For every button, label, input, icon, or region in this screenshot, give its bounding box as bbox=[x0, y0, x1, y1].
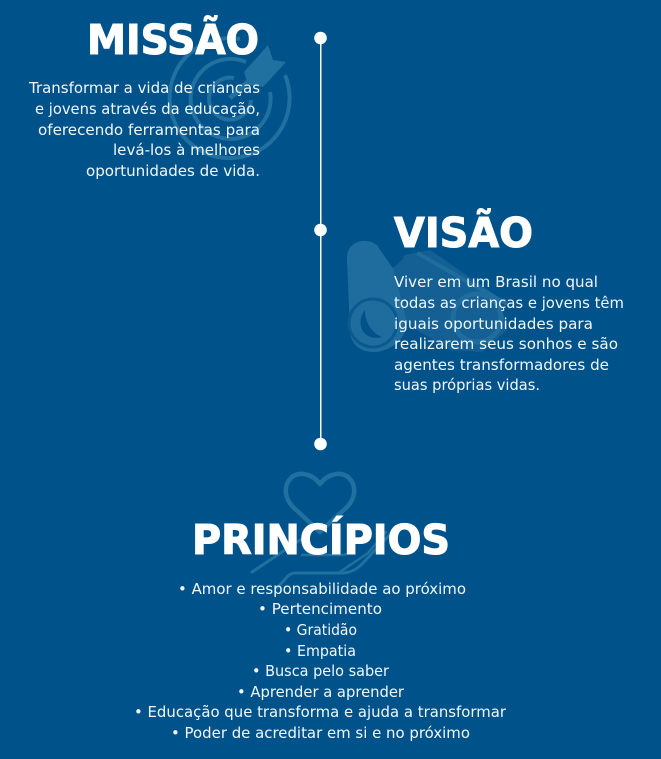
text: visão body: Viver em um Brasil no qual bbox=[394, 273, 598, 291]
timeline bbox=[314, 32, 327, 450]
text: visão body: suas próprias vidas. bbox=[394, 376, 540, 394]
icon: binoculars bbox=[347, 241, 507, 352]
list: princípios: • Aprender a aprender bbox=[237, 683, 405, 701]
heading: visão: VISÃO bbox=[394, 208, 533, 257]
list: princípios: • Educação que transforma e ajuda a transformar bbox=[134, 703, 507, 721]
list: princípios: • Pertencimento bbox=[258, 600, 382, 618]
text: missão body bbox=[28, 79, 260, 180]
icon: heart in hand bbox=[252, 474, 394, 588]
list: princípios: • Amor e responsabilidade ao próximo bbox=[178, 580, 466, 598]
text: visão body: todas as crianças e jovens têm bbox=[394, 294, 624, 312]
text: missão body: oportunidades de vida. bbox=[86, 162, 260, 180]
text: missão body: Transformar a vida de crianças bbox=[28, 79, 260, 97]
list: princípios: • Gratidão bbox=[284, 621, 357, 639]
text: visão body: agentes transformadores de bbox=[394, 356, 609, 374]
list: princípios bbox=[134, 580, 507, 742]
text: visão body: realizarem seus sonhos e são bbox=[394, 335, 618, 353]
heading: missão: MISSÃO bbox=[87, 15, 259, 64]
timeline dot: visão bbox=[314, 224, 327, 236]
list: princípios: • Poder de acreditar em si e no próximo bbox=[171, 724, 470, 742]
list: princípios: • Busca pelo saber bbox=[252, 662, 390, 680]
text: missão body: e jovens através da educação, bbox=[35, 100, 260, 118]
icon: target with arrow bbox=[170, 38, 290, 158]
timeline dot: princípios bbox=[314, 438, 327, 450]
text: missão body: oferecendo ferramentas para bbox=[38, 121, 260, 139]
timeline dot: missão bbox=[314, 32, 327, 44]
text: missão body: levá-los à melhores bbox=[113, 141, 260, 159]
list: princípios: • Empatia bbox=[284, 642, 356, 660]
text: visão body bbox=[394, 273, 624, 394]
heading: princípios: PRINCÍPIOS bbox=[192, 516, 450, 564]
text: visão body: iguais oportunidades para bbox=[394, 315, 593, 333]
